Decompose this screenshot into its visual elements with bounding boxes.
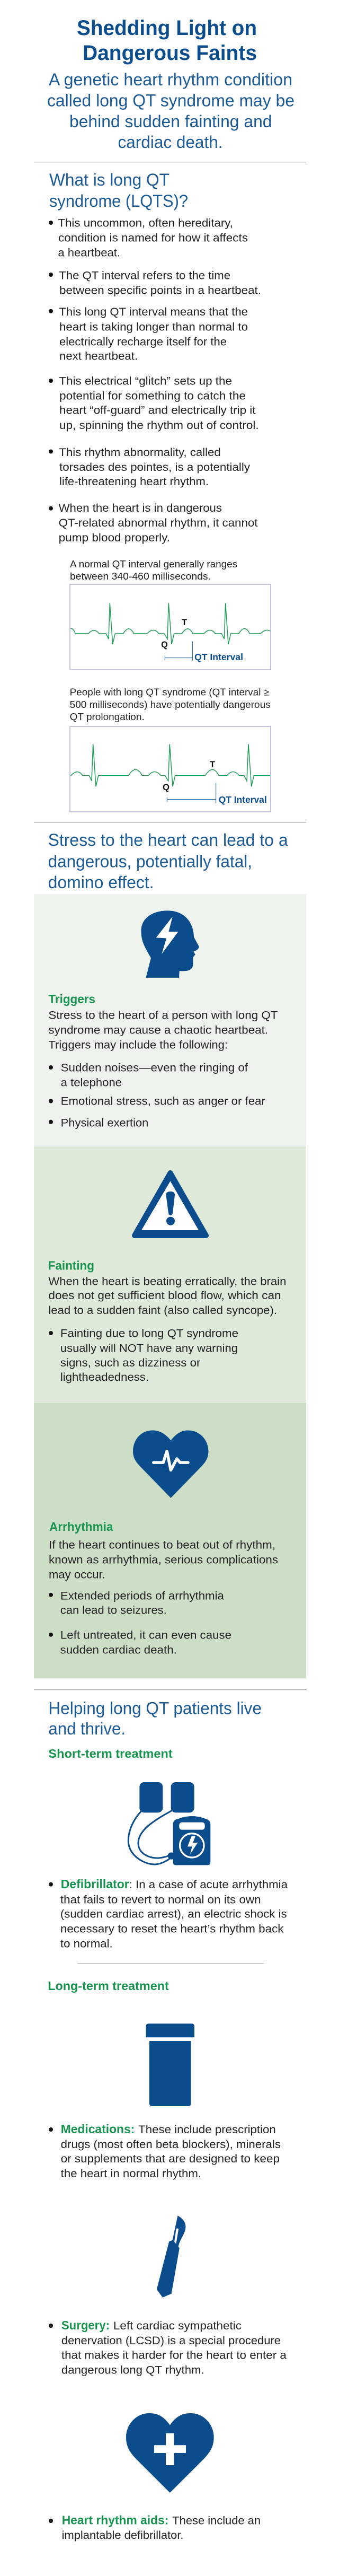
bullet: heart rhythm aids: implantable defibrillator.: [62, 2529, 183, 2542]
chart: prolonged ECG trace: Q: [163, 783, 170, 792]
heading: what is long QT syndrome: What is long QT: [49, 170, 170, 189]
bullet: defibrillator: to normal.: [60, 1937, 113, 1950]
heading: stress domino effect: dangerous, potentially fatal,: [48, 852, 252, 871]
text: fainting intro: does not get sufficient blood flow, which can: [48, 1289, 281, 1302]
chart: prolonged ECG trace: T: [210, 760, 215, 769]
heading: stress domino effect: [48, 830, 288, 892]
subtitle: behind sudden fainting and: [69, 112, 272, 131]
bullet list: what is LQTS: [49, 216, 261, 544]
caption: normal QT interval: A normal QT interval generally ranges: [70, 558, 237, 569]
bullet: heart rhythm aids: These include an: [172, 2514, 261, 2527]
bullet: medications: Medications:: [61, 2122, 135, 2136]
caption: long QT interval: 500 milliseconds) have potentially dangerous: [70, 699, 271, 710]
bullet: hereditary condition: a heartbeat.: [58, 247, 120, 259]
bullet: long QT meaning: electrically recharge itself for the: [59, 335, 227, 348]
text: triggers intro: [48, 1009, 278, 1051]
bullet: surgery: [49, 2318, 287, 2377]
bullet: torsades des pointes: This rhythm abnormality, called: [59, 446, 221, 459]
bullet: long QT meaning: This long QT interval means that the: [59, 305, 248, 318]
chart: normal ECG trace: T: [182, 618, 187, 627]
bullet: hereditary condition: This uncommon, often hereditary,: [58, 216, 233, 229]
bullet: long QT meaning: next heartbeat.: [59, 350, 138, 363]
text: arrhythmia intro: known as arrhythmia, serious complications: [49, 1554, 278, 1566]
bullet: electrical glitch: up, spinning the rhythm out of control.: [59, 419, 259, 432]
bullet: heart rhythm aids: Heart rhythm aids:: [62, 2513, 168, 2527]
bullet: medications: the heart in normal rhythm.: [61, 2167, 201, 2180]
caption: normal QT interval: [70, 558, 237, 582]
bullet: medications: [49, 2122, 281, 2180]
bullet: long QT meaning: [49, 305, 248, 363]
heading: fainting: Fainting: [48, 1258, 94, 1272]
bullet: cannot pump blood: pump blood properly.: [59, 531, 170, 544]
icon: heart with plus: [126, 2413, 214, 2493]
icon: heart with pulse: [133, 1430, 208, 1498]
icon: warning triangle: [135, 1173, 206, 1236]
chart: prolonged ECG trace: [70, 726, 271, 812]
bullet: cannot pump blood: QT-related abnormal rhythm, it cannot: [59, 516, 258, 529]
subtitle: [47, 70, 295, 152]
text: triggers intro: Triggers may include the following:: [48, 1038, 228, 1051]
bullet list: arrhythmia complications: [49, 1589, 231, 1656]
bullet: electrical glitch: This electrical “glitch” sets up the: [59, 374, 232, 387]
caption: normal QT interval: between 340-460 milliseconds.: [70, 571, 211, 582]
bullet: no warning signs: [49, 1327, 238, 1383]
heading: what is long QT syndrome: [49, 170, 188, 211]
bullet list: triggers: Sudden noises—even the ringing of: [61, 1061, 248, 1074]
bullet: defibrillator: [49, 1877, 288, 1950]
subtitle: A genetic heart rhythm condition: [49, 70, 292, 89]
bullet: surgery: Surgery:: [61, 2318, 110, 2332]
bullet: QT interval definition: between specific points in a heartbeat.: [59, 284, 261, 297]
bullet: medications: or supplements that are designed to keep: [61, 2152, 280, 2165]
bullet: medications: drugs (most often beta blockers), minerals: [61, 2138, 281, 2151]
bullet list: arrhythmia complications: sudden cardiac death.: [60, 1643, 177, 1656]
heading: stress domino effect: domino effect.: [48, 873, 154, 892]
bullet: surgery: dangerous long QT rhythm.: [61, 2364, 204, 2377]
bullet: defibrillator: : In a case of acute arrhythmia: [129, 1878, 288, 1891]
text: arrhythmia intro: may occur.: [49, 1569, 105, 1581]
caption: long QT interval: [70, 687, 271, 722]
heading: arrhythmia: Arrhythmia: [49, 1520, 113, 1534]
bullet: torsades des pointes: [49, 446, 250, 488]
bullet list: triggers: Physical exertion: [61, 1117, 148, 1129]
icon: defibrillator: [128, 1782, 210, 1865]
bullet list: triggers: Emotional stress, such as anger or fear: [61, 1095, 265, 1108]
bullet: QT interval definition: The QT interval refers to the time: [59, 269, 230, 282]
text: fainting intro: lead to a sudden faint (also called syncope).: [48, 1304, 277, 1317]
bullet: surgery: that makes it harder for the heart to enter a: [61, 2349, 287, 2362]
text: arrhythmia intro: [49, 1538, 278, 1581]
title: [77, 16, 257, 65]
icon: medicine bottle: [146, 2023, 194, 2106]
chart: normal ECG trace: QT Interval: [194, 652, 243, 662]
bullet list: triggers: a telephone: [61, 1076, 122, 1089]
heading: helping long QT patients: [48, 1699, 262, 1738]
bullet: torsades des pointes: life-threatening heart rhythm.: [59, 475, 209, 488]
bullet: hereditary condition: condition is named for how it affects: [58, 232, 248, 244]
bullet: defibrillator: Defibrillator: [61, 1877, 129, 1891]
bullet: defibrillator: necessary to reset the heart’s rhythm back: [60, 1922, 284, 1935]
panel: fainting: [34, 1146, 306, 1403]
chart: normal ECG trace: [70, 584, 271, 670]
title: Dangerous Faints: [83, 41, 257, 65]
panel: triggers: [34, 894, 306, 1146]
bullet: surgery: denervation (LCSD) is a special procedure: [61, 2334, 281, 2347]
bullet: cannot pump blood: [49, 502, 258, 544]
subtitle: called long QT syndrome may be: [47, 91, 295, 110]
heading: what is long QT syndrome: syndrome (LQTS)?: [49, 191, 188, 211]
subtitle: cardiac death.: [118, 133, 222, 152]
bullet: cannot pump blood: When the heart is in dangerous: [59, 502, 222, 514]
icon: scalpel: [157, 2215, 185, 2298]
heading: short-term treatment: Short-term treatment: [48, 1747, 173, 1760]
bullet: surgery: Left cardiac sympathetic: [113, 2319, 242, 2332]
heading: helping long QT patients: Helping long QT patients live: [48, 1699, 262, 1718]
bullet: electrical glitch: [49, 374, 259, 432]
chart: normal ECG trace: Q: [161, 640, 168, 650]
bullet: long QT meaning: heart is taking longer than normal to: [59, 320, 248, 333]
bullet: torsades des pointes: torsades des pointes, is a potentially: [59, 461, 250, 474]
bullet: defibrillator: that fails to revert to normal on its own: [60, 1893, 261, 1906]
bullet list: arrhythmia complications: Left untreated, it can even cause: [60, 1628, 231, 1641]
panel: arrhythmia: [34, 1403, 306, 1678]
bullet: medications: These include prescription: [138, 2123, 276, 2136]
heading: helping long QT patients: and thrive.: [48, 1719, 126, 1738]
bullet list: arrhythmia complications: Extended periods of arrhythmia: [60, 1589, 224, 1602]
bullet: electrical glitch: heart “off-guard” and electrically trip it: [59, 404, 256, 417]
heading: long-term treatment: Long-term treatment: [48, 1979, 169, 1993]
bullet: heart rhythm aids: [49, 2513, 261, 2542]
bullet: hereditary condition: [49, 216, 248, 259]
chart: prolonged ECG trace: QT Interval: [219, 794, 267, 805]
bullet list: triggers: [49, 1061, 265, 1129]
icon: head with lightning bolt: [141, 910, 199, 978]
bullet: no warning signs: Fainting due to long QT syndrome: [60, 1327, 238, 1339]
text: triggers intro: syndrome may cause a chaotic heartbeat.: [48, 1023, 268, 1036]
caption: long QT interval: QT prolongation.: [70, 711, 145, 722]
text: fainting intro: [48, 1275, 286, 1317]
text: fainting intro: When the heart is beating erratically, the brain: [48, 1275, 286, 1287]
bullet: QT interval definition: [49, 269, 261, 297]
bullet list: arrhythmia complications: can lead to seizures.: [60, 1604, 167, 1616]
text: triggers intro: Stress to the heart of a person with long QT: [48, 1009, 278, 1021]
bullet: no warning signs: lightheadedness.: [60, 1371, 149, 1383]
bullet: electrical glitch: potential for something to catch the: [59, 390, 246, 402]
heading: triggers: Triggers: [48, 992, 95, 1006]
title: Shedding Light on: [77, 16, 257, 40]
bullet: no warning signs: signs, such as dizziness or: [60, 1356, 200, 1369]
heading: stress domino effect: Stress to the heart can lead to a: [48, 830, 288, 849]
caption: long QT interval: People with long QT syndrome (QT interval ≥: [70, 687, 269, 698]
bullet: no warning signs: usually will NOT have any warning: [60, 1342, 238, 1354]
bullet: defibrillator: (sudden cardiac arrest), an electric shock is: [60, 1907, 287, 1920]
text: arrhythmia intro: If the heart continues to beat out of rhythm,: [49, 1538, 275, 1551]
